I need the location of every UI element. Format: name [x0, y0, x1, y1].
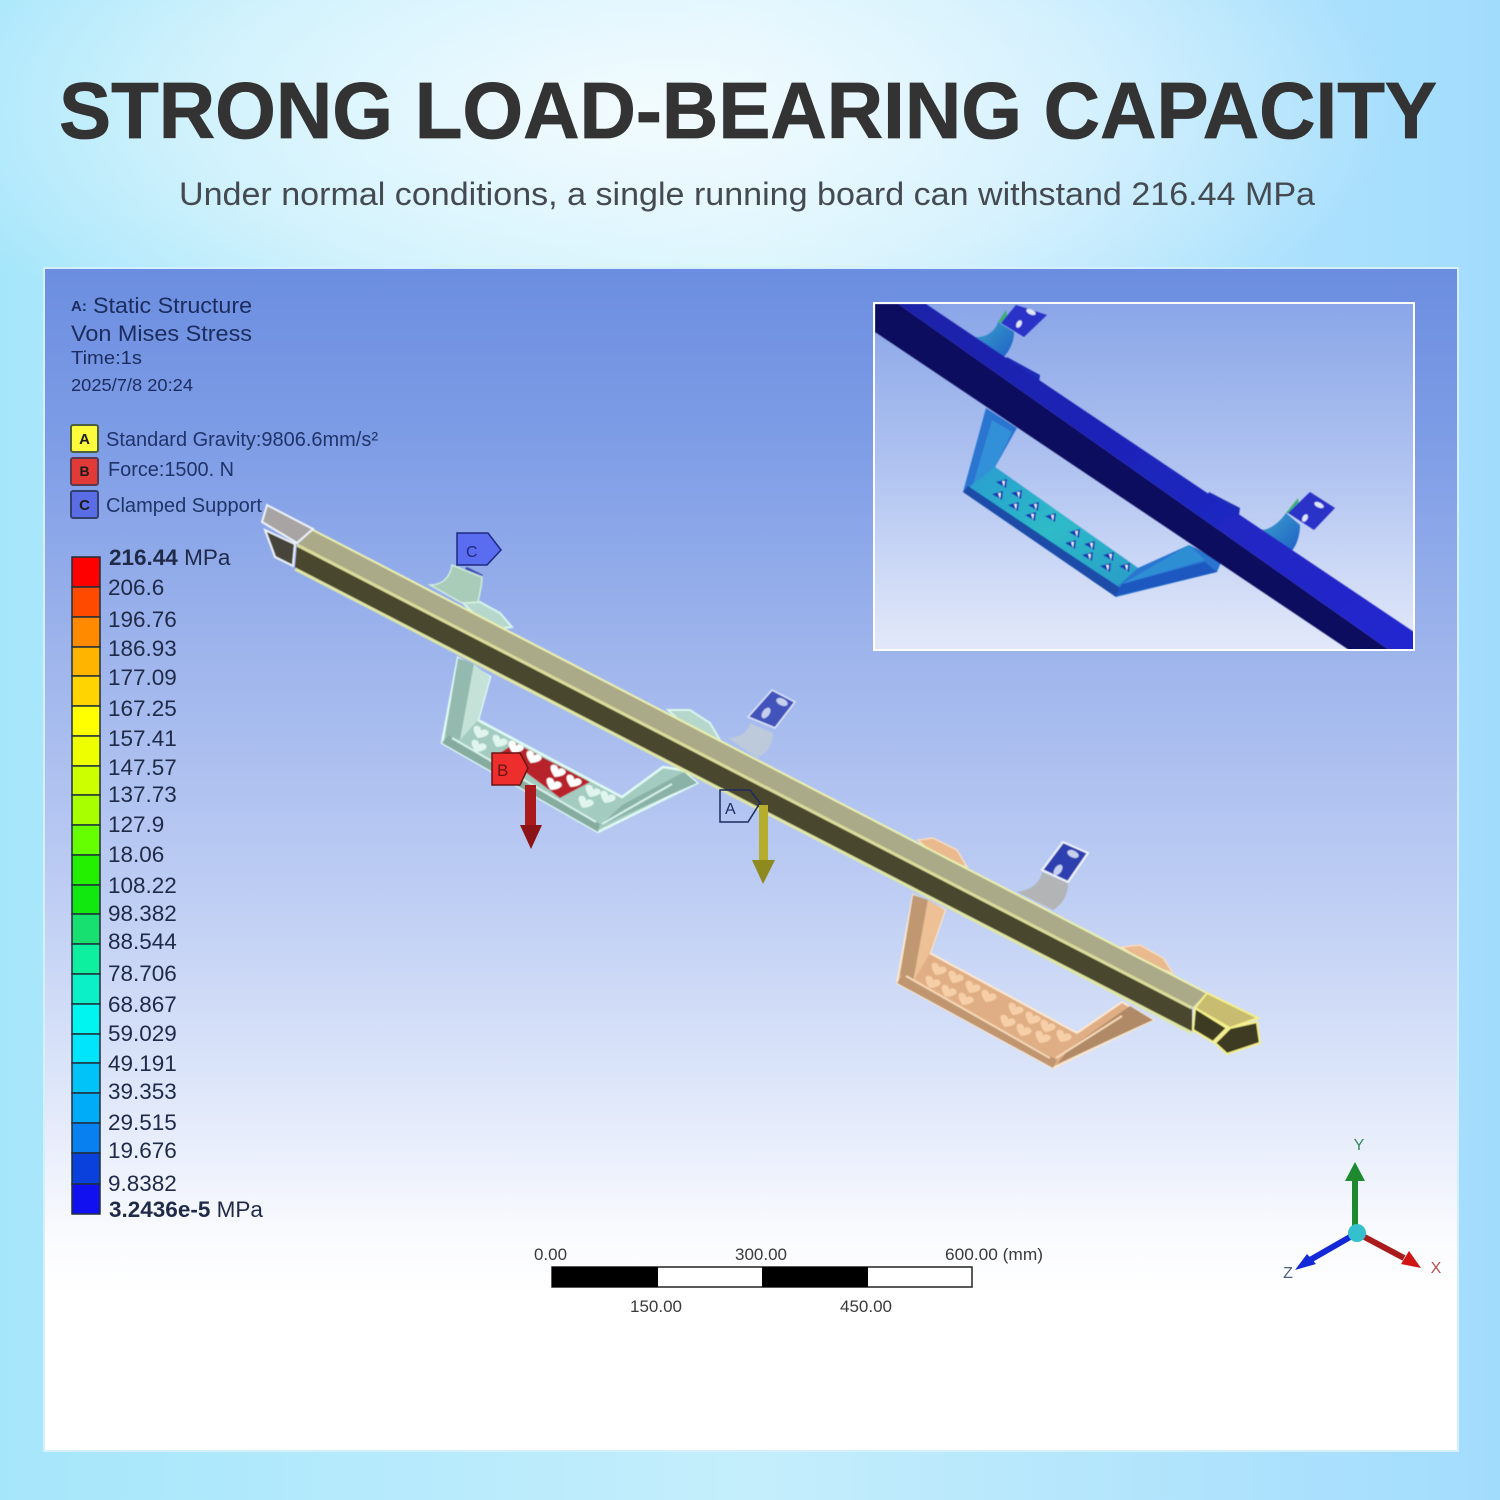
stress scale labels: 127.9	[108, 812, 164, 837]
inset lower bracket	[1261, 492, 1335, 552]
stress scale labels: 186.93	[108, 636, 177, 661]
stress scale labels: 98.382	[108, 901, 177, 926]
stress scale labels: 29.515	[108, 1110, 177, 1135]
stress scale labels: 88.544	[108, 929, 177, 954]
running board 3D model	[262, 505, 1260, 1068]
legend item B: force: Force:1500. N	[108, 459, 234, 481]
step 2 (peach)	[897, 838, 1173, 1068]
inset step	[963, 408, 1222, 597]
stress scale labels: 3.2436e-5 MPa	[109, 1197, 263, 1222]
legend item A: standard gravity: Standard Gravity:9806.6mm/s²	[106, 429, 378, 451]
axis triad: X	[1431, 1260, 1442, 1277]
stress scale labels: 196.76	[108, 607, 177, 632]
arrow: gravity A: A	[725, 801, 736, 818]
inset top bracket	[975, 305, 1047, 358]
callout C: clamped support marker: C	[466, 544, 478, 561]
beam left end cap	[262, 505, 313, 566]
mounting bracket 3	[1017, 842, 1088, 910]
legend item A: standard gravity: A	[79, 431, 90, 448]
stress colour scale	[72, 557, 100, 1214]
simulation header text: Time:1s	[71, 347, 142, 368]
legend item B: force	[71, 458, 234, 485]
mounting bracket 2	[728, 690, 795, 758]
red force area	[500, 743, 590, 798]
stress scale labels: 78.706	[108, 961, 177, 986]
stress scale labels: 49.191	[108, 1051, 177, 1076]
panel: stress simulation	[44, 268, 1458, 1451]
simulation header text	[71, 293, 252, 395]
stress scale labels: 157.41	[108, 726, 177, 751]
axis triad	[1283, 1137, 1442, 1282]
stress scale labels: 216.44 MPa	[109, 545, 231, 570]
axis triad: Z	[1283, 1265, 1293, 1282]
stress scale labels: 206.6	[108, 575, 164, 600]
stress scale labels: 9.8382	[108, 1171, 177, 1196]
stress scale labels: 137.73	[108, 782, 177, 807]
step 1 (pale green)	[442, 602, 720, 832]
scale bar: 0.00	[534, 1245, 567, 1264]
arrow: force B	[492, 753, 542, 849]
simulation header text: Von Mises Stress	[71, 321, 252, 346]
stress scale labels: 177.09	[108, 665, 177, 690]
legend item C: clamped support: Clamped Support	[106, 495, 262, 517]
axis triad: Y	[1354, 1137, 1365, 1154]
simulation header text: 2025/7/8 20:24	[71, 375, 193, 395]
inset: stress result close-up	[874, 303, 1414, 650]
stress scale labels	[108, 545, 263, 1222]
load legend	[71, 425, 378, 518]
scale bar: 150.00	[630, 1297, 682, 1316]
arrow: gravity A	[720, 790, 775, 884]
scale bar	[534, 1245, 1043, 1316]
subtitle: Under normal conditions, a single running board can withstand 216.44 MPa	[179, 176, 1315, 212]
stress scale labels: 68.867	[108, 992, 177, 1017]
stress scale labels: 18.06	[108, 842, 164, 867]
legend item B: force: B	[79, 463, 90, 479]
stress scale labels: 39.353	[108, 1079, 177, 1104]
simulation header text: A:	[71, 298, 87, 315]
stress scale labels: 167.25	[108, 696, 177, 721]
scale bar: 600.00 (mm)	[945, 1245, 1043, 1264]
stress scale labels: 108.22	[108, 873, 177, 898]
title: STRONG LOAD-BEARING CAPACITY	[59, 66, 1437, 155]
scale bar: 450.00	[840, 1297, 892, 1316]
legend item C: clamped support	[71, 491, 262, 518]
beam right end cap	[1193, 993, 1260, 1054]
stress scale labels: 147.57	[108, 755, 177, 780]
simulation header text: Static Structure	[93, 293, 252, 318]
legend item C: clamped support: C	[79, 497, 90, 514]
panel background	[44, 268, 1458, 1451]
scale bar: 300.00	[735, 1245, 787, 1264]
callout C: clamped support marker	[457, 533, 501, 565]
inset beam	[875, 304, 1414, 650]
mounting bracket 1	[430, 565, 483, 603]
main beam	[295, 530, 1207, 1033]
stress scale labels: 19.676	[108, 1138, 177, 1163]
arrow: force B: B	[497, 761, 508, 780]
stress scale labels: 59.029	[108, 1021, 177, 1046]
